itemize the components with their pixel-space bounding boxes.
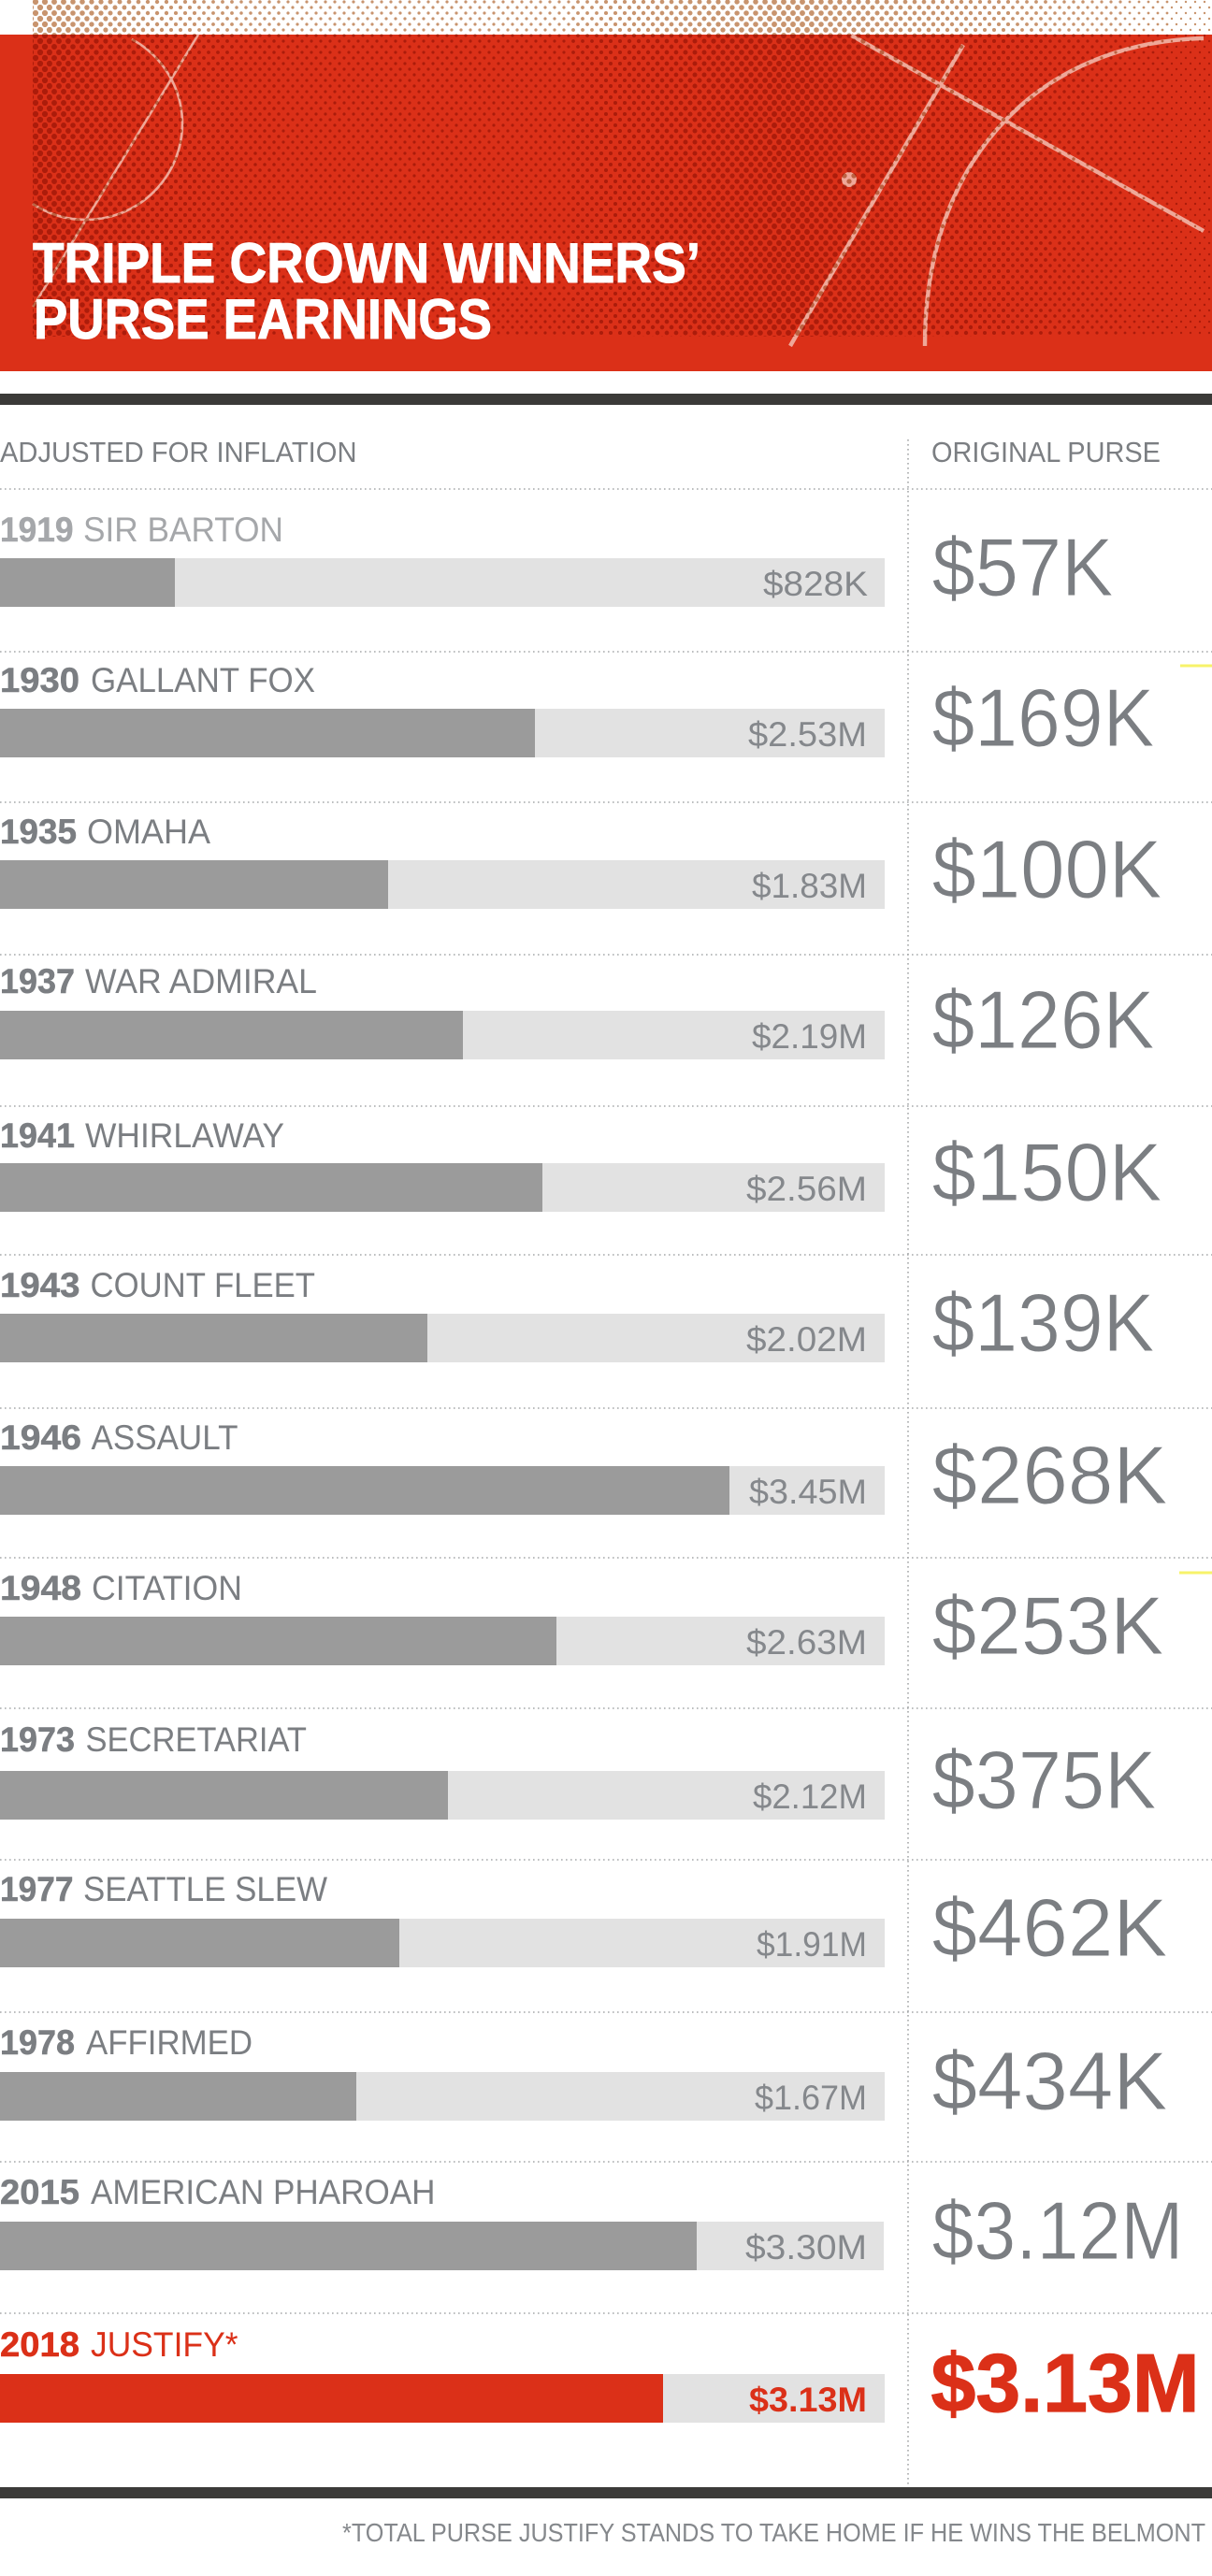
- original purse value: $57K: [931, 521, 1113, 613]
- bar: $1.67M: [755, 2079, 867, 2117]
- label: [0, 511, 283, 549]
- bar: $2.56M: [746, 1170, 867, 1208]
- label: [0, 661, 315, 699]
- bar: [0, 709, 885, 757]
- bar: $2.02M: [746, 1320, 867, 1359]
- original purse value: $375K: [931, 1734, 1156, 1826]
- bar: $1.91M: [757, 1925, 867, 1964]
- bar: [0, 860, 885, 909]
- label: [0, 813, 210, 851]
- original purse value: $3.12M: [931, 2184, 1184, 2277]
- label: [0, 2325, 238, 2364]
- row: 1937 War Admiral: [0, 962, 1154, 1066]
- bar: [0, 2222, 884, 2270]
- label: SEATTLE SLEW: [83, 1870, 327, 1908]
- label: 1930: [0, 661, 79, 699]
- label: [0, 1116, 284, 1155]
- bar: $2.63M: [746, 1623, 867, 1662]
- yellow tick: [1179, 1571, 1212, 1575]
- label: 1941: [0, 1116, 75, 1155]
- column heading: adjusted for inflation: ADJUSTED FOR INFLATION: [0, 436, 357, 468]
- label: 1973: [0, 1720, 75, 1759]
- original purse value: $169K: [931, 671, 1154, 764]
- row: 1973 Secretariat: [0, 1720, 1156, 1826]
- bar: [0, 1011, 885, 1059]
- bar: $3.45M: [749, 1473, 867, 1511]
- original purse value: $3.13M: [931, 2337, 1199, 2429]
- row: 1930 Gallant Fox: [0, 661, 1154, 764]
- icon: racetrack lines, right: [790, 36, 1204, 346]
- bar: $2.53M: [748, 715, 867, 754]
- row: 1978 Affirmed: [0, 2023, 1167, 2127]
- row: 1941 Whirlaway: [0, 1116, 1162, 1218]
- label: [0, 1266, 315, 1304]
- label: [0, 1569, 242, 1607]
- original purse value: $139K: [931, 1276, 1154, 1369]
- original purse value: $434K: [931, 2035, 1167, 2127]
- bar: [0, 2072, 885, 2121]
- bar: [0, 1163, 885, 1212]
- label: WHIRLAWAY: [85, 1116, 284, 1155]
- row: 1948 Citation: [0, 1569, 1163, 1672]
- label: 1946: [0, 1418, 81, 1457]
- label: [0, 2023, 252, 2062]
- bar: [0, 1919, 885, 1967]
- bar: [0, 558, 885, 607]
- label: COUNT FLEET: [90, 1266, 315, 1304]
- label: [0, 1418, 238, 1457]
- label: 1978: [0, 2023, 75, 2062]
- label: 1948: [0, 1569, 81, 1607]
- halftone dot pattern: [33, 0, 1212, 337]
- title: PURSE EARNINGS: [34, 288, 492, 351]
- label: [0, 1720, 307, 1759]
- row: 1943 Count Fleet: [0, 1266, 1154, 1369]
- label: 1977: [0, 1870, 73, 1908]
- label: SIR BARTON: [83, 511, 283, 549]
- bar: [0, 1466, 885, 1515]
- header banner: [0, 0, 1212, 371]
- row: 1946 Assault: [0, 1418, 1167, 1521]
- bar: $1.83M: [752, 867, 867, 905]
- label: 1919: [0, 511, 73, 549]
- row: 2018 Justify (highlighted): [0, 2325, 1199, 2429]
- title: TRIPLE CROWN WINNERS’: [33, 232, 700, 295]
- bar: $828K: [763, 565, 868, 603]
- bar: [0, 1771, 885, 1820]
- row: 1977 Seattle Slew: [0, 1870, 1167, 1974]
- bar: $2.19M: [752, 1017, 867, 1056]
- label: 1937: [0, 962, 75, 1000]
- original purse value: $100K: [931, 823, 1162, 915]
- original purse value: $126K: [931, 973, 1154, 1066]
- label: JUSTIFY*: [91, 2325, 238, 2364]
- bar: $2.12M: [753, 1777, 867, 1816]
- label: SECRETARIAT: [86, 1720, 307, 1759]
- row: 2015 American Pharoah: [0, 2173, 1184, 2277]
- label: 1943: [0, 1266, 80, 1304]
- bar: $3.30M: [745, 2228, 867, 2267]
- label: CITATION: [92, 1569, 242, 1607]
- label: 2018: [0, 2325, 79, 2364]
- label: 2015: [0, 2173, 79, 2211]
- label: GALLANT FOX: [91, 661, 315, 699]
- label: AFFIRMED: [86, 2023, 252, 2062]
- original purse value: $462K: [931, 1881, 1167, 1974]
- column heading: original purse: ORIGINAL PURSE: [931, 436, 1161, 468]
- row: 1919 Sir Barton: [0, 511, 1113, 613]
- label: WAR ADMIRAL: [85, 962, 317, 1000]
- row: 1935 Omaha: [0, 813, 1162, 915]
- bar: $3.13M: [749, 2381, 867, 2419]
- red panel: [0, 35, 1212, 371]
- title: [33, 232, 700, 351]
- original purse value: $150K: [931, 1126, 1162, 1218]
- label: OMAHA: [87, 813, 210, 851]
- label: AMERICAN PHAROAH: [91, 2173, 436, 2211]
- bar: [0, 2374, 885, 2423]
- original purse value: $268K: [931, 1429, 1167, 1521]
- bar: [0, 1617, 885, 1665]
- bar: [0, 1314, 885, 1362]
- label: 1935: [0, 813, 77, 851]
- original purse value: $253K: [931, 1579, 1163, 1672]
- icon: racetrack lines, left: [33, 35, 198, 307]
- label: ASSAULT: [92, 1418, 238, 1457]
- yellow tick: [1180, 664, 1212, 668]
